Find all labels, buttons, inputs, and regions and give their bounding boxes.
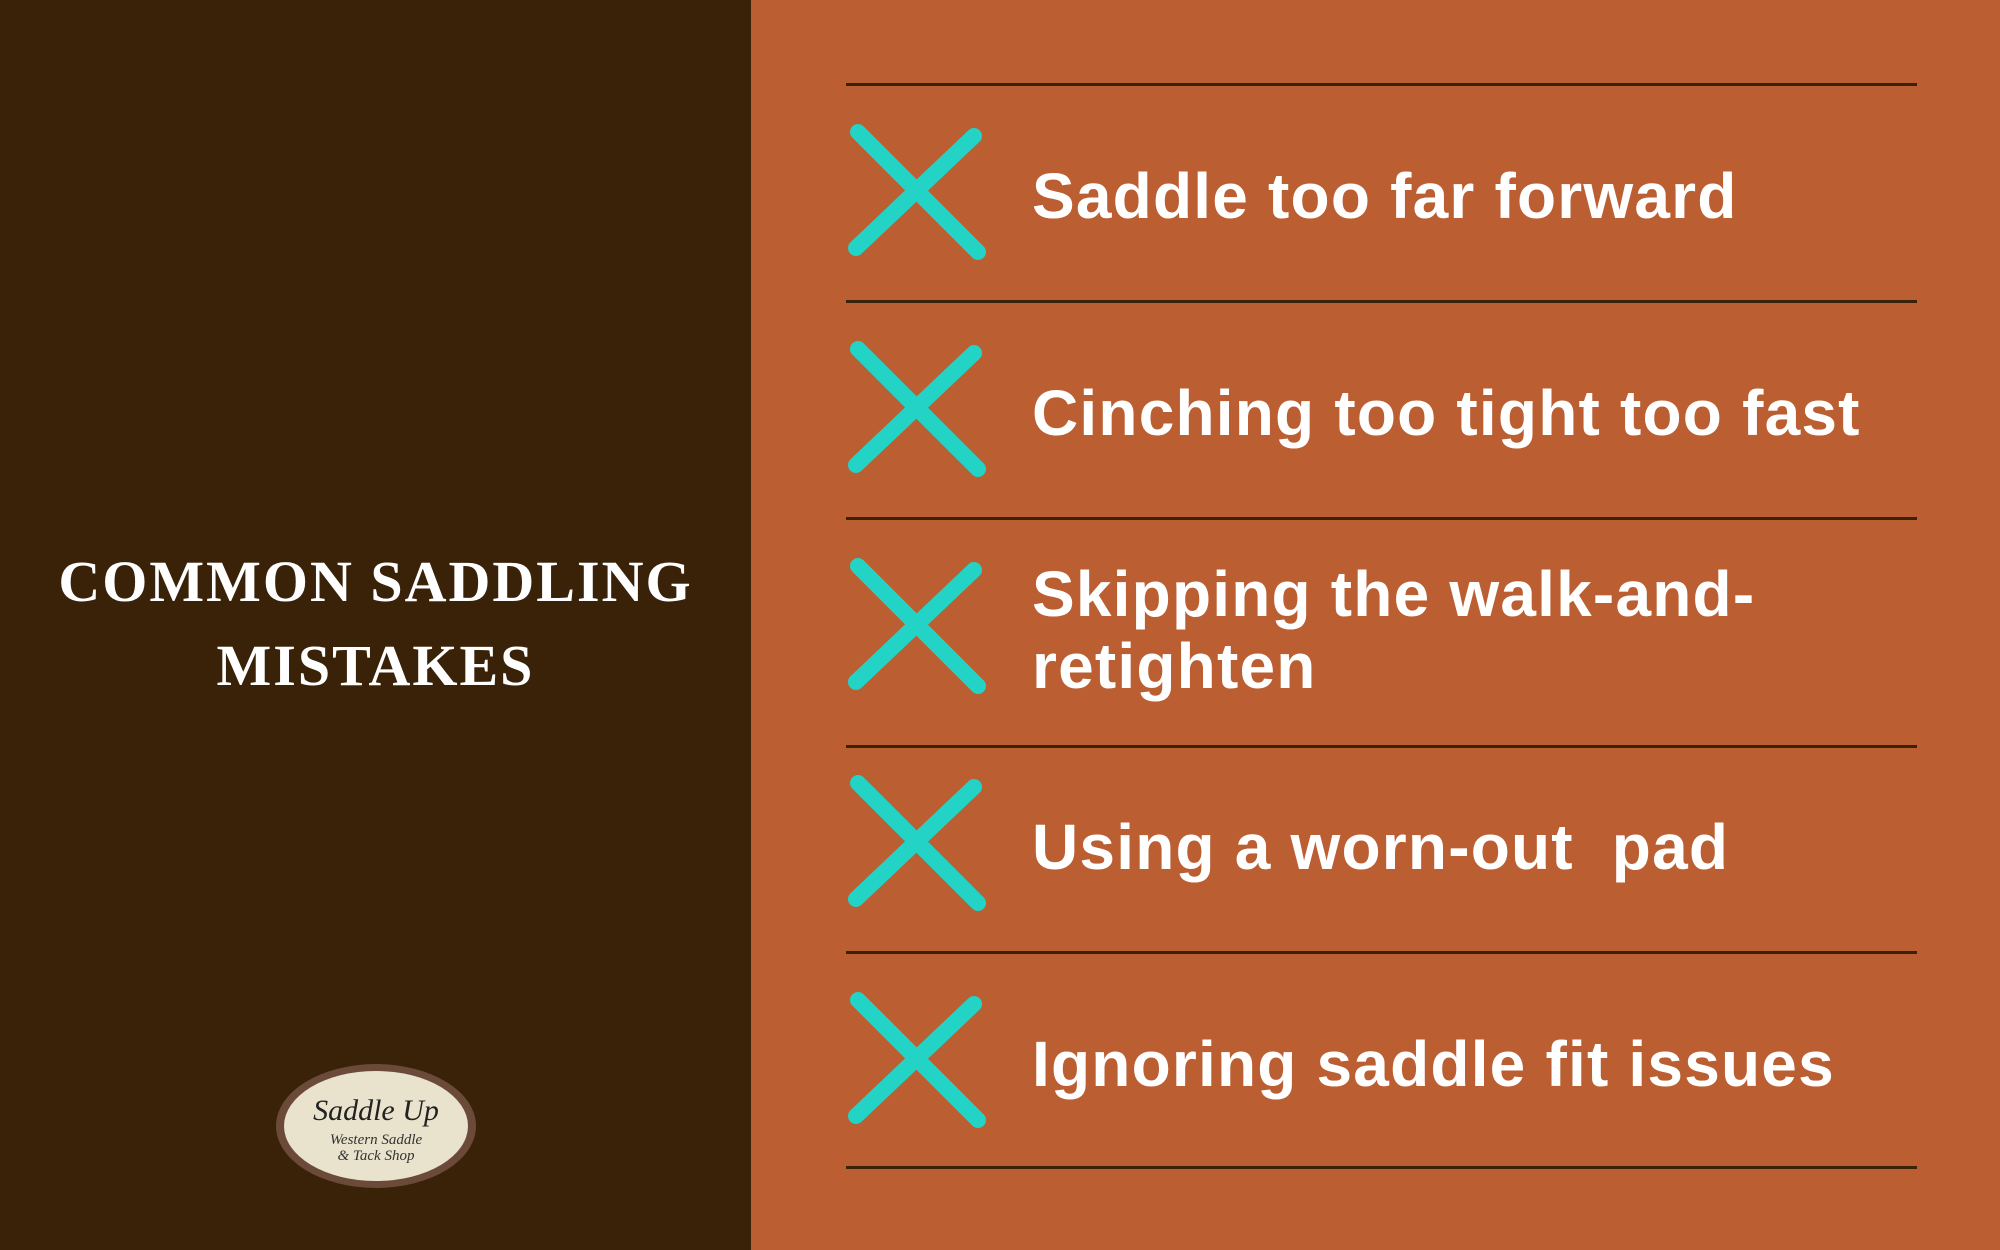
icon: X 4 [848, 775, 986, 911]
text 3: retighten [1032, 630, 1317, 702]
icon: X 3 [848, 558, 986, 694]
text 3: Skipping the walk-and- [1032, 558, 1755, 630]
text 1: Saddle too far forward [1032, 160, 1738, 232]
icon: X 2 [848, 341, 986, 477]
text 5: Ignoring saddle fit issues [1032, 1028, 1835, 1100]
logo: Saddle Up: Saddle Up [313, 1094, 439, 1127]
title: COMMON SADDLING [58, 549, 693, 614]
icon: X 1 [848, 124, 986, 260]
logo: Saddle Up: Western Saddle [330, 1132, 423, 1148]
title [58, 549, 693, 698]
icon: X 5 [848, 992, 986, 1128]
logo: Saddle Up: & Tack Shop [338, 1148, 415, 1164]
title: MISTAKES [217, 633, 534, 698]
text 3 [1032, 558, 1755, 702]
text 4: Using a worn-out pad [1032, 811, 1729, 883]
panel: left dark [0, 0, 751, 1250]
logo: Saddle Up [276, 1064, 476, 1188]
text 2: Cinching too tight too fast [1032, 377, 1861, 449]
